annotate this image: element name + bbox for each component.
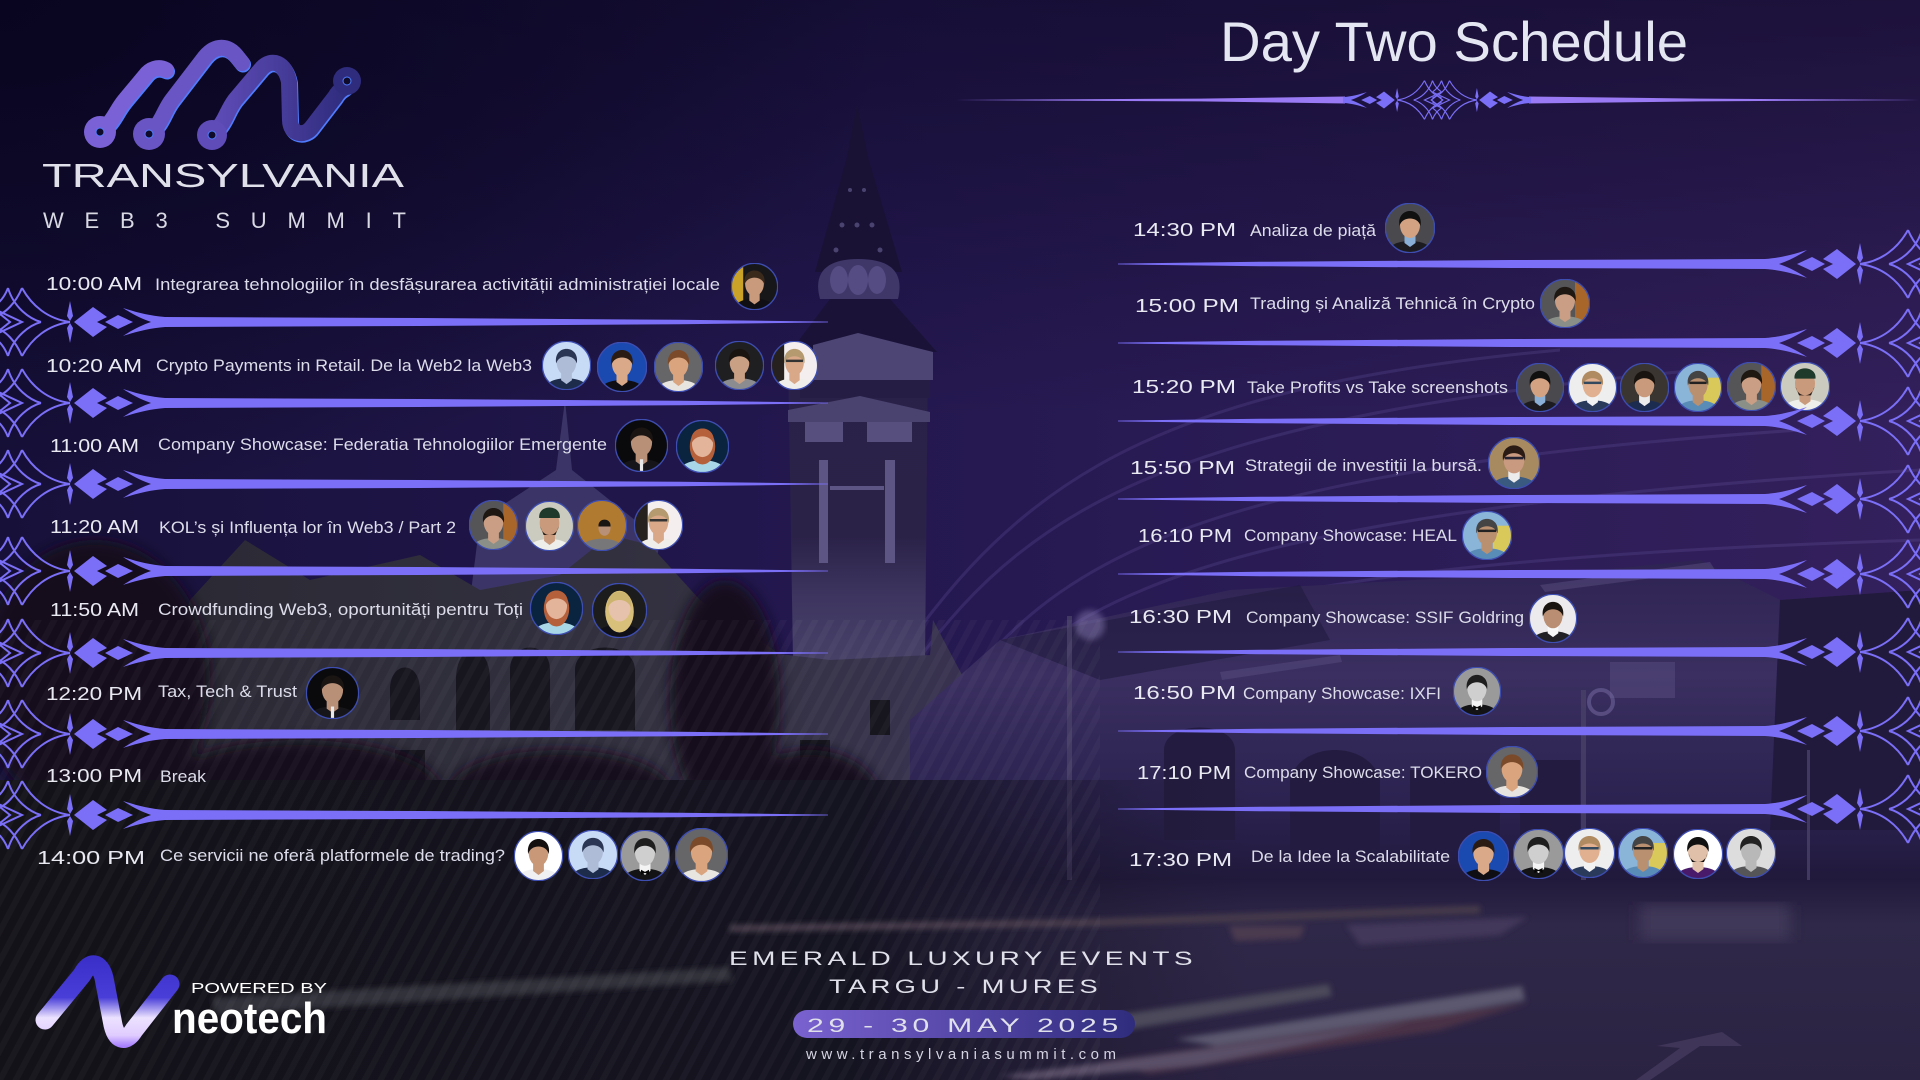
panel: afternoon schedule [1118,203,1920,882]
time: 17:10 PM [1137,762,1231,783]
topic: Take Profits vs Take screenshots [1247,378,1508,397]
topic: Strategii de investiții la bursă. [1245,456,1482,475]
row 12:20 [46,667,359,720]
trees [0,540,880,850]
left building [150,535,1100,810]
speakers [530,582,647,639]
topic: Break [160,767,207,786]
row 16:10 [1138,511,1512,561]
divider ornament [0,537,828,605]
row 15:20 [1132,362,1830,413]
time: 17:30 PM [1129,849,1232,870]
speakers [615,419,729,474]
speaker avatar [306,667,359,720]
dome [470,400,660,600]
topic: Company Showcase: TOKERO [1244,763,1482,782]
logo: Transylvania Web3 Summit [42,48,406,233]
divider ornament [1118,618,1920,686]
clock tower [788,104,937,660]
neotech wordmark: neotech [172,994,327,1043]
right building [910,560,1920,920]
topic: KOL’s și Influența lor în Web3 / Part 2 [159,518,456,537]
title ornament divider [955,81,1920,119]
topic: Analiza de piață [1250,221,1377,240]
left building windows [330,648,890,800]
row 10:00 [46,263,778,311]
topic: Crypto Payments in Retail. De la Web2 la Web3 [156,356,532,375]
logo mark [84,48,361,150]
row 15:50 [1130,437,1540,490]
time: 15:00 PM [1135,295,1239,316]
row 11:50 [50,582,647,639]
speakers [1458,828,1776,882]
row 11:20 [50,500,683,552]
divider ornament [1118,775,1920,843]
topic: Trading și Analiză Tehnică în Crypto [1250,294,1535,313]
speaker avatar [1486,746,1538,799]
divider ornament [0,450,828,518]
time: 10:00 AM [46,273,142,294]
topic: Crowdfunding Web3, oportunități pentru Toți [158,600,523,619]
speakers [514,828,728,883]
date pill [793,1010,1135,1038]
row 13:00 [46,765,207,786]
speaker avatar [1488,437,1540,490]
time: 11:20 AM [50,516,139,537]
event information [729,949,1197,1063]
date pill: 29 - 30 MAY 2025 [807,1016,1123,1037]
time: 16:50 PM [1133,682,1236,703]
speakers [469,500,683,552]
topic: Company Showcase: SSIF Goldring [1246,608,1524,627]
time: 14:30 PM [1133,219,1236,240]
logo subtitle: WEB3 SUMMIT [43,208,406,233]
divider ornament [1118,540,1920,608]
speaker avatar [1385,203,1435,254]
ground shadow [0,780,1250,1080]
time: 16:10 PM [1138,525,1232,546]
topic: De la Idee la Scalabilitate [1251,847,1450,866]
speaker avatar [1529,594,1577,644]
row 15:00 [1135,279,1590,329]
speaker avatar [731,263,778,311]
time: 10:20 AM [46,355,142,376]
divider ornament [1118,230,1920,298]
speakers [1516,362,1830,413]
topic: Company Showcase: Federatia Tehnologiilor Emergente [158,435,607,454]
speakers [542,341,818,393]
divider ornament [0,700,828,768]
heading: Day Two Schedule [1220,10,1688,73]
panel: morning schedule [0,263,828,883]
powered by label: POWERED BY [191,980,327,997]
row 17:10 [1137,746,1538,799]
road [850,880,1920,1080]
divider ornament [0,369,828,437]
website: www.transylvaniasummit.com [805,1046,1116,1063]
time: 16:30 PM [1129,606,1232,627]
time: 11:50 AM [50,599,139,620]
topic: Tax, Tech & Trust [158,682,297,701]
row 10:20 [46,341,818,393]
logo: powered by neotech [45,965,327,1043]
divider ornament [1118,387,1920,455]
logo wordmark: TRANSYLVANIA [42,157,404,194]
time: 14:00 PM [37,847,145,868]
topic: Company Showcase: HEAL [1244,526,1457,545]
speaker avatar [1453,667,1501,717]
speaker avatar [1462,511,1512,561]
topic: Integrarea tehnologiilor în desfășurarea activității administrației locale [155,275,720,294]
topic: Company Showcase: IXFI [1243,684,1441,703]
time: 15:20 PM [1132,376,1236,397]
road light streaks [212,906,1530,1080]
venue: EMERALD LUXURY EVENTS [729,949,1197,970]
row 17:30 [1129,828,1776,882]
divider ornament [1118,697,1920,765]
time: 12:20 PM [46,683,142,704]
divider ornament [0,288,828,356]
divider ornament [1118,309,1920,377]
speaker avatar [1540,279,1590,329]
divider ornament [0,781,828,849]
row 14:00 [37,828,728,883]
time: 13:00 PM [46,765,142,786]
row 11:00 [50,419,729,474]
row 16:30 [1129,594,1577,644]
row 16:50 [1133,667,1501,717]
time: 11:00 AM [50,435,139,456]
light arcs [870,350,1920,700]
row 14:30 [1133,203,1435,254]
topic: Ce servicii ne oferă platformele de trading? [160,846,505,865]
divider ornament [1118,465,1920,533]
divider ornament [0,619,828,687]
neotech mark [45,965,170,1038]
time: 15:50 PM [1130,457,1235,478]
city: TARGU - MURES [829,977,1102,998]
